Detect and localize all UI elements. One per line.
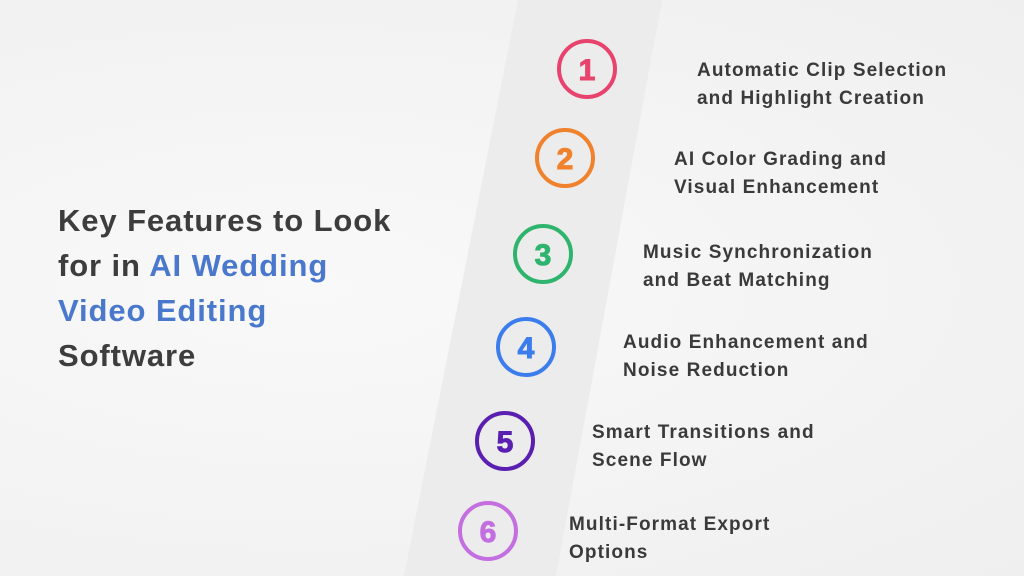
circle 1: 1 [579, 54, 595, 87]
feature 4 [623, 332, 869, 381]
title: for in AI Wedding [58, 248, 328, 283]
feature 4: Audio Enhancement and [623, 332, 869, 353]
title: Software [58, 338, 196, 373]
feature 6: Options [569, 542, 648, 563]
feature 2 [674, 149, 887, 198]
feature 1: and Highlight Creation [697, 88, 925, 109]
circle 2: 2 [557, 143, 573, 176]
circle 6 [460, 503, 516, 559]
feature 3 [643, 242, 873, 291]
feature 5 [592, 422, 815, 471]
feature 4: Noise Reduction [623, 360, 789, 381]
circle 2 [537, 130, 593, 186]
circle 5: 5 [497, 426, 513, 459]
feature 6: Multi-Format Export [569, 514, 770, 535]
circle 1 [559, 41, 615, 97]
feature 1: Automatic Clip Selection [697, 60, 947, 81]
circle 4: 4 [518, 332, 535, 365]
circle 4 [498, 319, 554, 375]
circle 5 [477, 413, 533, 469]
feature 2: AI Color Grading and [674, 149, 887, 170]
title: Video Editing [58, 293, 267, 328]
feature 3: and Beat Matching [643, 270, 831, 291]
feature 6 [569, 514, 770, 563]
feature 1 [697, 60, 947, 109]
title: Key Features to Look [58, 203, 391, 238]
feature 3: Music Synchronization [643, 242, 873, 263]
feature 5: Scene Flow [592, 450, 708, 471]
circle 3 [515, 226, 571, 282]
circle 3: 3 [535, 239, 551, 272]
circle 6: 6 [480, 516, 496, 549]
feature 2: Visual Enhancement [674, 177, 879, 198]
title [58, 203, 391, 373]
feature 5: Smart Transitions and [592, 422, 815, 443]
